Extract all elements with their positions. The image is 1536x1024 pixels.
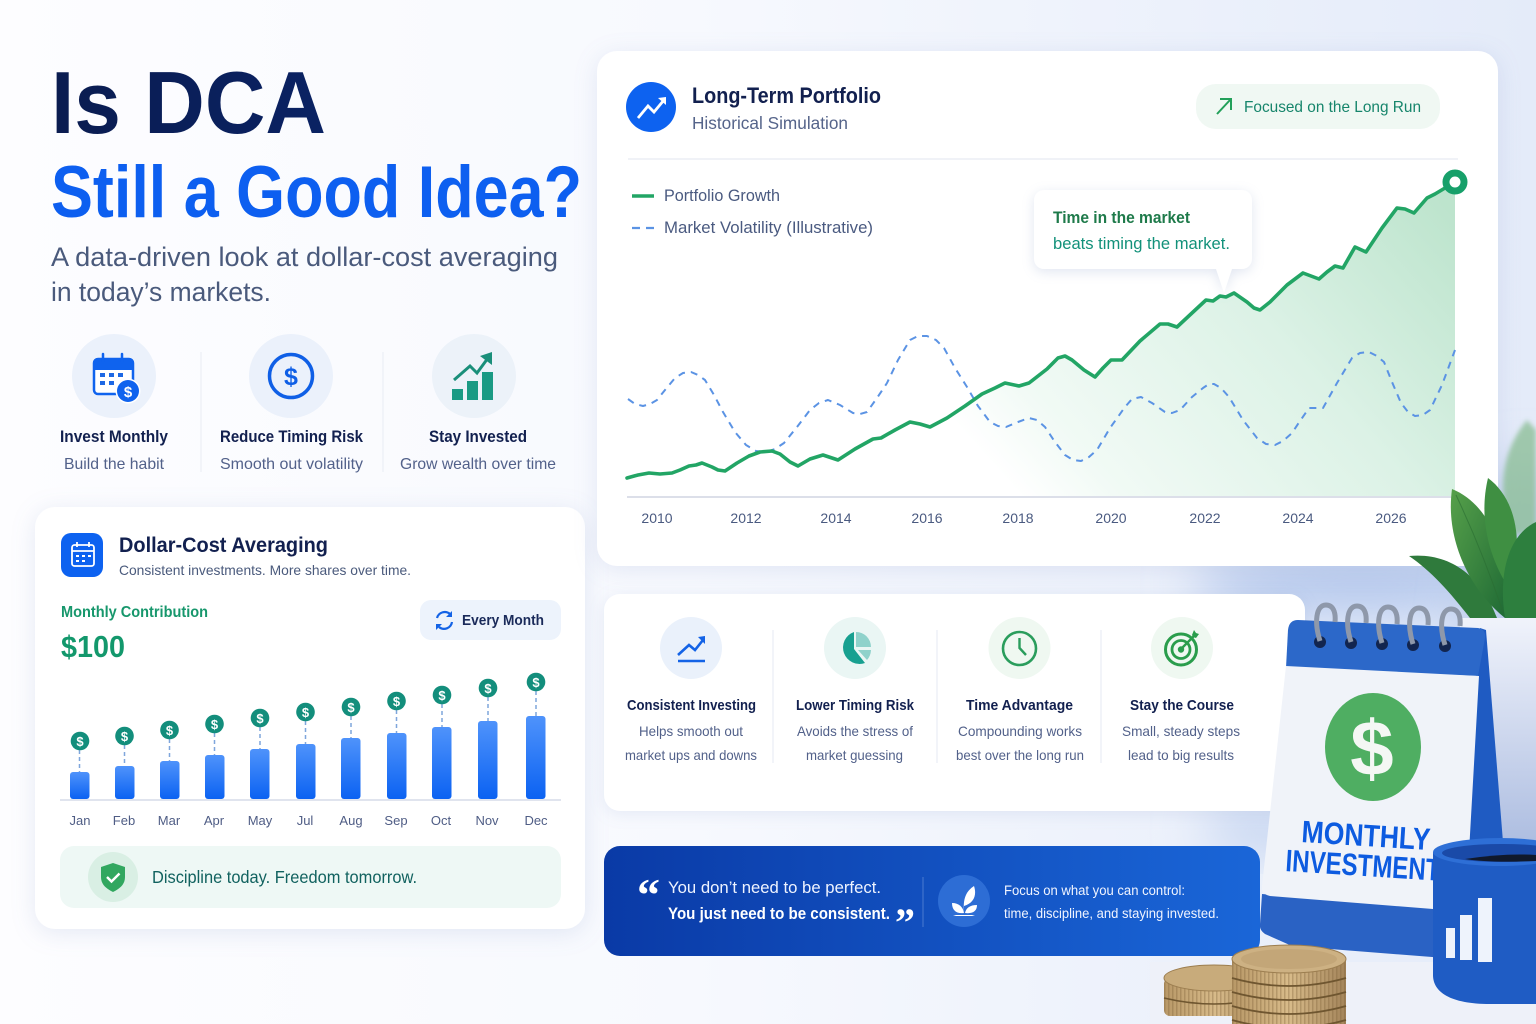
panel: quote banner <box>604 846 1260 956</box>
bar chart: monthly contributions: Mar <box>158 813 181 828</box>
icon: sprout <box>938 875 990 927</box>
calendar label <box>1285 814 1441 888</box>
calendar label: MONTHLY <box>1301 814 1432 857</box>
quote text <box>637 869 915 945</box>
bar chart: monthly contributions: $ <box>484 681 492 696</box>
line chart: portfolio growth vs volatility <box>627 173 1464 497</box>
x-axis years: 2016 <box>911 510 943 526</box>
feature: invest monthly: $ <box>124 384 133 401</box>
benefit: lower timing risk: market guessing <box>806 747 903 763</box>
subtitle: in today’s markets. <box>51 277 271 307</box>
x-axis years: 2018 <box>1002 510 1034 526</box>
feature row <box>60 334 556 473</box>
bar chart: monthly contributions: Jul <box>297 813 313 828</box>
bar chart: monthly contributions: Oct <box>431 813 451 828</box>
focus text: Focus on what you can control: <box>1004 883 1185 898</box>
legend <box>632 187 873 237</box>
bar chart: monthly contributions: $ <box>438 688 446 703</box>
benefit: time advantage: Time Advantage <box>966 697 1073 714</box>
calendar label: INVESTMENT <box>1285 843 1441 888</box>
quote text: You just need to be consistent. <box>668 904 890 923</box>
bar chart: monthly contributions: $ <box>166 723 174 738</box>
x-axis years: 2024 <box>1282 510 1314 526</box>
x-axis years: 2020 <box>1095 510 1127 526</box>
panel: long-term portfolio <box>597 51 1498 566</box>
x-axis years: 2012 <box>730 510 762 526</box>
bar chart: monthly contributions <box>60 673 561 828</box>
focus text: time, discipline, and staying invested. <box>1004 906 1219 921</box>
pill: every month: Every Month <box>462 613 544 629</box>
subtitle: A data-driven look at dollar-cost averaging <box>51 242 558 272</box>
feature: invest monthly <box>60 334 169 473</box>
icon: calendar tile <box>61 533 103 577</box>
monthly contribution amount: $100 <box>61 629 125 664</box>
callout: discipline <box>60 846 561 908</box>
bar chart: monthly contributions: May <box>248 813 273 828</box>
panel heading: Consistent investments. More shares over time. <box>119 562 411 578</box>
legend: Market Volatility (Illustrative) <box>664 219 873 237</box>
panel: benefits <box>604 594 1305 811</box>
benefit: consistent investing: market ups and downs <box>625 747 757 763</box>
benefit: stay the course: Small, steady steps <box>1122 723 1240 739</box>
x-axis years: 2026 <box>1375 510 1407 526</box>
pill: every month <box>420 600 561 640</box>
bar chart: monthly contributions: $ <box>347 700 355 715</box>
bar chart: monthly contributions: Sep <box>384 813 408 828</box>
benefit: consistent investing <box>625 617 757 763</box>
benefit: lower timing risk: Lower Timing Risk <box>796 697 915 714</box>
monthly contribution amount <box>61 604 208 664</box>
benefit: lower timing risk: Avoids the stress of <box>797 723 913 739</box>
title: Still a Good Idea? <box>51 152 582 233</box>
chart heading: Historical Simulation <box>692 113 848 133</box>
feature: invest monthly: Build the habit <box>64 456 165 473</box>
bar chart: monthly contributions: Apr <box>204 813 225 828</box>
quote text: You don’t need to be perfect. <box>668 878 881 897</box>
feature: reduce timing risk: Reduce Timing Risk <box>220 428 364 446</box>
feature: reduce timing risk: Smooth out volatility <box>220 456 363 473</box>
illustration: potted plant <box>1409 420 1536 858</box>
illustration: coffee mug <box>1433 838 1536 1004</box>
chart heading <box>692 83 881 133</box>
feature: reduce timing risk <box>220 334 364 473</box>
title <box>51 53 582 233</box>
benefit: consistent investing: Helps smooth out <box>639 723 743 739</box>
callout: time in the market: beats timing the market. <box>1053 235 1230 253</box>
benefit: stay the course <box>1122 617 1240 763</box>
x-axis years: 2022 <box>1189 510 1221 526</box>
quote text: ” <box>895 900 915 945</box>
benefit: stay the course: Stay the Course <box>1130 697 1234 714</box>
callout: time in the market <box>1034 190 1252 293</box>
bar chart: monthly contributions: $ <box>532 675 540 690</box>
quote text: “ <box>637 869 660 920</box>
subtitle <box>51 242 558 307</box>
bar chart: monthly contributions: $ <box>211 717 219 732</box>
monthly contribution amount: Monthly Contribution <box>61 604 208 621</box>
feature: stay invested: Grow wealth over time <box>400 456 556 473</box>
illustration: coin stacks <box>1164 945 1346 1024</box>
bar chart: monthly contributions: Feb <box>113 813 135 828</box>
icon: trend circle <box>626 82 676 132</box>
bar chart: monthly contributions: $ <box>256 711 264 726</box>
benefit: lower timing risk <box>796 617 915 763</box>
callout: discipline: Discipline today. Freedom tomorrow. <box>152 867 417 887</box>
icon: dollar badge <box>1325 693 1421 801</box>
bar chart: monthly contributions: Dec <box>524 813 548 828</box>
feature: reduce timing risk: $ <box>284 363 298 391</box>
feature: stay invested <box>400 334 556 473</box>
x-axis years: 2014 <box>820 510 852 526</box>
bar chart: monthly contributions: Jan <box>70 813 90 828</box>
benefit: consistent investing: Consistent Investing <box>627 697 756 714</box>
chart heading: Long-Term Portfolio <box>692 83 881 108</box>
bar chart: monthly contributions: $ <box>302 705 310 720</box>
benefit: time advantage: best over the long run <box>956 747 1084 763</box>
x-axis years: 2010 <box>641 510 673 526</box>
bar chart: monthly contributions: Aug <box>339 813 363 828</box>
bar chart: monthly contributions: $ <box>76 734 84 749</box>
icon: dollar badge: $ <box>1350 704 1394 792</box>
bar chart: monthly contributions: $ <box>121 729 129 744</box>
feature: stay invested: Stay Invested <box>429 428 527 446</box>
benefit: time advantage <box>956 617 1084 763</box>
illustration: desk calendar <box>1260 605 1503 958</box>
title: Is DCA <box>51 53 326 152</box>
legend: Portfolio Growth <box>664 187 780 205</box>
benefit: time advantage: Compounding works <box>958 723 1082 739</box>
panel heading <box>119 534 411 578</box>
feature: invest monthly: Invest Monthly <box>60 428 169 446</box>
bar chart: monthly contributions: $ <box>393 694 401 709</box>
panel heading: Dollar-Cost Averaging <box>119 534 328 557</box>
pill: focused on the long run: Focused on the Long Run <box>1244 99 1421 116</box>
pill: focused on the long run <box>1196 84 1440 129</box>
benefit: stay the course: lead to big results <box>1128 747 1234 763</box>
bar chart: monthly contributions: Nov <box>475 813 499 828</box>
x-axis years <box>641 510 1407 526</box>
callout: time in the market: Time in the market <box>1053 209 1190 227</box>
panel: dollar-cost averaging <box>35 507 585 929</box>
focus text <box>1004 883 1219 921</box>
